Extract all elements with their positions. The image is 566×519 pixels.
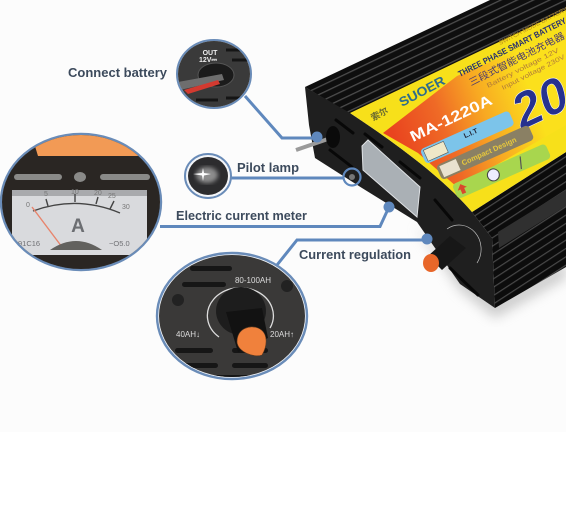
meter class: −O5.0 (109, 239, 130, 248)
model number: MA-1220A (407, 92, 495, 146)
power cable (296, 139, 328, 150)
connector dot: battery (312, 132, 322, 142)
meter slots (14, 174, 62, 180)
charger: orange label gradient (383, 30, 566, 187)
callout circle: current regulation knob (155, 250, 310, 381)
callout circle: current meter (0, 130, 165, 275)
cable dark (178, 74, 224, 90)
orange label edge (35, 135, 138, 156)
compact design strip: Compact Design (460, 135, 518, 167)
infographic: battery charger feature callouts (0, 0, 566, 380)
connector lines (160, 96, 427, 265)
charger: right side fins (472, 152, 566, 308)
callout circle: battery connector (176, 39, 252, 109)
clear meter window (362, 140, 420, 217)
spec line two: Input voltage 230V (501, 53, 566, 92)
meter code: 91C16 (18, 239, 40, 248)
callout circle: pilot lamp (185, 154, 231, 199)
label: electric current meter: Electric current meter (176, 209, 307, 223)
12V label: 12V⎓ (199, 57, 217, 64)
LIT strip (420, 110, 515, 164)
charger: drop shadow (415, 225, 566, 318)
connector dot: meter (384, 202, 394, 212)
port slots (196, 50, 248, 100)
range label top: 80-100AH (235, 276, 271, 285)
meter face (12, 190, 147, 255)
dial collar (216, 287, 266, 335)
meter pivot (50, 241, 102, 250)
knob head (237, 327, 266, 356)
scale numbers: 5 (44, 191, 48, 198)
dial arc (207, 288, 273, 337)
chinese heading: 三段式智能电池充电器 (467, 30, 566, 89)
line: current regulation (277, 240, 427, 265)
charger product photo (296, 0, 566, 318)
scale numbers: 20 (94, 190, 102, 197)
charger: top fins (305, 0, 566, 114)
pilot lamp on unit (349, 174, 355, 180)
line: connect battery (245, 96, 317, 138)
lamp glow (196, 167, 218, 183)
green features strip (452, 143, 551, 199)
range label left: 40AH↓ (176, 330, 200, 339)
charger: yellow label panel (350, 10, 566, 212)
charger: right side groove (498, 190, 566, 248)
meter unit A: A (71, 216, 85, 237)
scale numbers: 0 (26, 202, 30, 209)
charger: front panel (305, 87, 495, 308)
scale numbers: 30 (122, 204, 130, 211)
dial ring (447, 225, 481, 263)
port socket (198, 63, 234, 87)
scale numbers: 25 (108, 193, 116, 200)
dial shaft (428, 236, 466, 270)
scale numbers: 10 (71, 189, 79, 196)
spec lines: Battery voltage 12V (486, 47, 561, 90)
out label: OUT (203, 50, 218, 57)
range label right: 20AH↑ (270, 330, 294, 339)
panel slots (175, 266, 268, 381)
label: current regulation: Current regulation (299, 248, 411, 262)
cable red (184, 80, 220, 94)
front slots (330, 120, 478, 295)
switch mode line: SWITCH MODE BATTERY (498, 7, 566, 47)
compact design strip (436, 125, 535, 180)
knob body (226, 308, 268, 352)
out port (326, 126, 340, 148)
LIT strip: L.I.T (463, 128, 480, 140)
brand mark: 索尔 (369, 105, 390, 123)
connector dot: regulation (422, 234, 432, 244)
line: electric current meter (160, 207, 389, 226)
meter scale arc (33, 203, 120, 213)
orange knob (423, 254, 439, 272)
scale numbers (26, 189, 130, 211)
label: connect battery: Connect battery (68, 66, 167, 80)
brand logo: SUOER (396, 73, 448, 110)
line: pilot lamp (229, 176, 344, 180)
lamp sparkle (193, 168, 211, 181)
label: pilot lamp: Pilot lamp (237, 161, 299, 175)
screws (172, 294, 184, 306)
connector ring: pilot lamp (344, 168, 360, 186)
meter needle (32, 207, 62, 247)
